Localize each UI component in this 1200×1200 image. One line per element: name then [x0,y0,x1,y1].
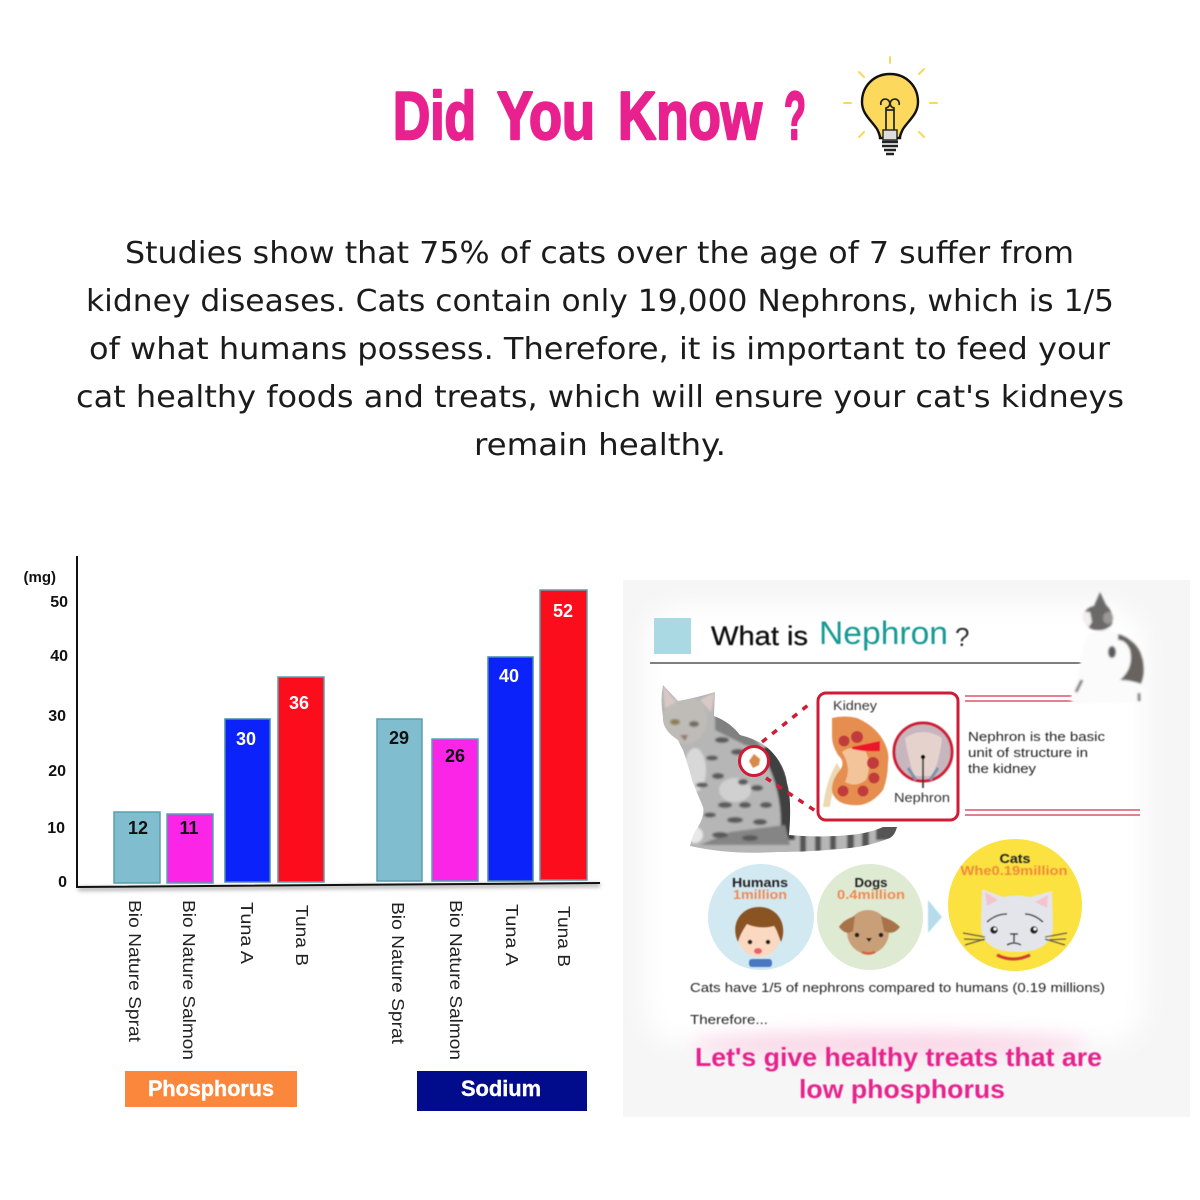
bar value labels: 30 [236,729,256,749]
category labels: Bio Nature Sprat [125,900,145,1042]
category labels: Tuna B [292,905,312,966]
heading: What is [711,621,808,651]
illustration: double rules [965,696,1140,815]
kidney callout box: Kidney [833,698,878,713]
y axis labels [24,569,68,891]
bar value labels [128,601,573,838]
bar value labels: 12 [128,818,148,838]
humans circle [708,864,814,970]
icon: kidney [823,716,888,807]
heading [711,615,969,652]
phosphorus bars [114,677,324,883]
bar value labels: 52 [553,601,573,621]
nephron description: unit of structure in [968,746,1088,760]
tail bands [798,827,897,852]
title [393,78,806,154]
arrow [928,900,942,933]
illustration: grey tabby cat [662,685,897,853]
dogs circle [817,864,923,970]
title: Did [393,78,476,154]
cats circle: Whe0.19million [960,864,1068,878]
panel: what is nephron [623,580,1190,1117]
bar value labels: 26 [445,746,465,766]
legend: phosphorus [125,1071,297,1107]
call to action [695,1042,1102,1104]
bar value labels: 11 [179,818,199,838]
paragraph text: of what humans possess. Therefore, it is important to feed your [89,332,1111,367]
heading: Nephron [819,615,948,651]
sodium bars [377,590,587,881]
kidney callout box: Nephron [894,790,950,805]
y axis labels: 30 [48,708,66,725]
y axis labels: 0 [58,874,67,891]
dark back shadow [760,745,795,840]
category labels: Tuna B [554,906,574,967]
category labels: Bio Nature Salmon [179,900,199,1060]
bar value labels: 40 [499,666,519,686]
call to action: Let's give healthy treats that are [695,1042,1102,1072]
y axis labels: 40 [50,648,68,665]
category labels: Tuna A [502,904,522,966]
y axis labels: (mg) [24,569,56,586]
paragraph text: Studies show that 75% of cats over the age of 7 suffer from [125,236,1074,271]
category labels: Bio Nature Sprat [388,902,408,1044]
category labels: Tuna A [237,902,257,964]
cats circle [948,839,1082,971]
dogs circle: 0.4million [837,888,905,902]
y axis labels: 50 [50,594,68,611]
pink glow [690,1032,1090,1056]
tabby markings [696,737,772,841]
humans circle: 1million [733,888,787,902]
eyes and nose [670,719,680,725]
dogs circle: Dogs [854,876,888,890]
kidney callout box [818,693,958,820]
nephron description: Nephron is the basic [968,730,1105,744]
icon: nephron circle [894,723,952,788]
cats circle: Cats [1000,852,1031,866]
face and chest highlights [665,699,705,742]
heading square [654,618,691,654]
paragraph text: cat healthy foods and treats, which will ensure your cat's kidneys [76,380,1124,415]
paragraph text: remain healthy. [474,428,726,463]
heading rule [650,662,1084,664]
nephron description [968,730,1105,776]
humans circle: Humans [732,876,788,890]
nephron description: the kidney [968,762,1037,776]
dashed leader lines [762,702,817,812]
bar chart [24,556,600,1111]
y axis labels: 10 [47,820,65,837]
paragraph text [76,236,1124,463]
icon: light bulb [844,57,937,154]
category labels [125,900,574,1060]
magnifier circle [740,746,768,776]
therefore label: Therefore... [690,1013,768,1027]
icon: boy [735,907,783,967]
ears [663,685,676,708]
legend: sodium [417,1071,587,1111]
illustration: small kitten [1070,592,1144,704]
category labels: Bio Nature Salmon [446,900,466,1060]
paragraph text: kidney diseases. Cats contain only 19,000 Nephrons, which is 1/5 [86,284,1114,319]
title: ? [784,78,806,154]
bar value labels: 36 [289,693,309,713]
call to action: low phosphorus [799,1074,1005,1104]
legend: phosphorus: Phosphorus [148,1076,274,1101]
y axis labels: 20 [48,763,66,780]
title: You [497,78,595,154]
bar value labels: 29 [389,728,409,748]
title: Know [618,78,763,154]
heading: ? [955,622,969,652]
icon: puppy [839,910,900,954]
icon: sad cat [963,889,1067,959]
legend: sodium: Sodium [461,1076,541,1101]
comparison caption: Cats have 1/5 of nephrons compared to humans (0.19 millions) [690,981,1105,995]
axes [76,556,600,889]
